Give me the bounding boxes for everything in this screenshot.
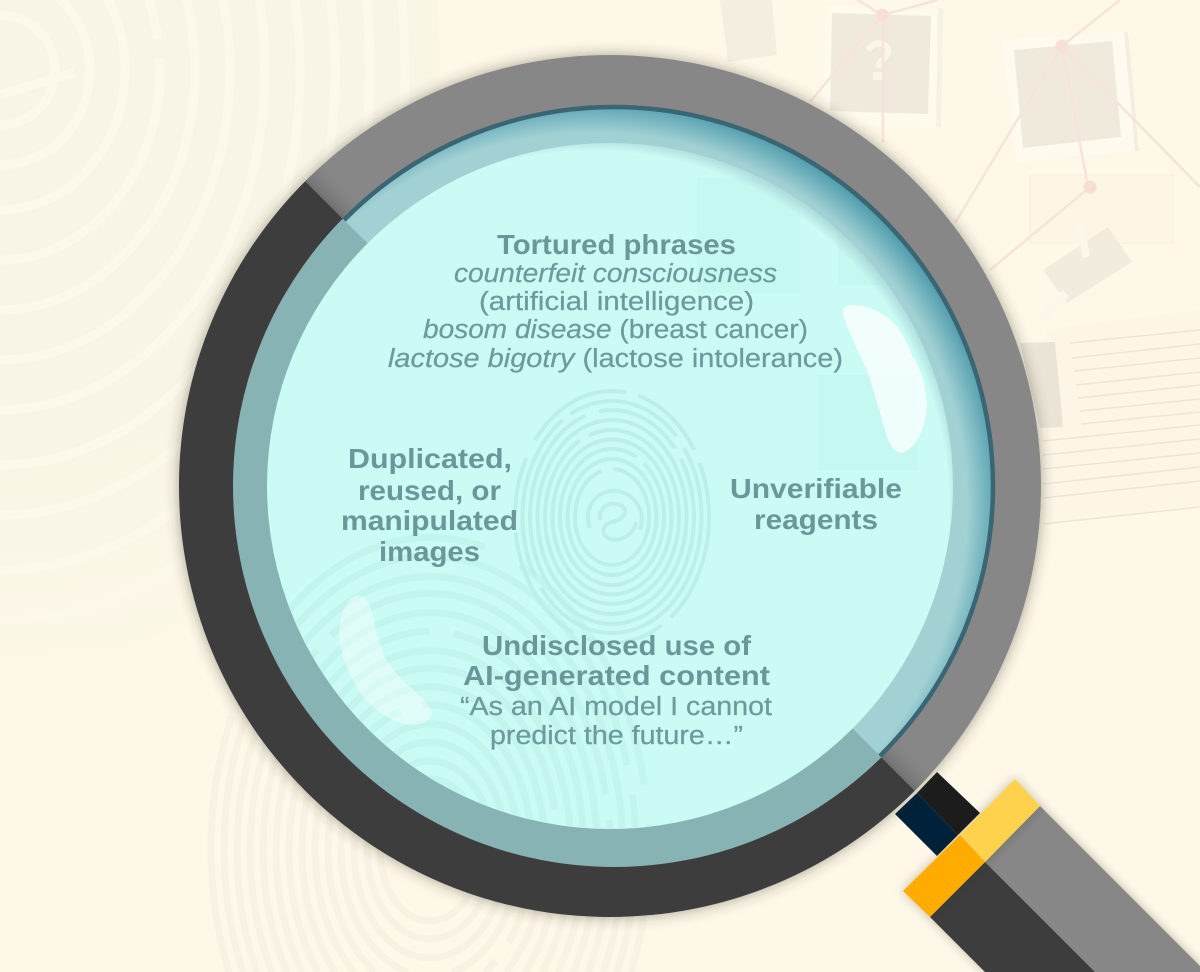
text: undisclosed AI content: “As an AI model I cannot [460, 693, 772, 721]
dark edge [342, 104, 996, 758]
glass edge shading [346, 109, 991, 754]
text: unverifiable reagents [730, 473, 902, 535]
text: duplicated images: manipulated [341, 505, 518, 536]
taped scrap [1038, 223, 1132, 322]
background fingerprint: top left [0, 0, 440, 670]
lens rim: upper-right [342, 135, 965, 758]
glare: left [339, 595, 432, 725]
pins [876, 8, 1096, 194]
text: duplicated images: reused, or [358, 475, 501, 506]
neck [895, 772, 980, 856]
lens [233, 104, 996, 867]
rim seam shading [305, 170, 928, 791]
grip [930, 806, 1200, 972]
magnifying glass handle [895, 772, 1200, 972]
example 1 meaning: (artificial intelligence) [479, 288, 754, 316]
red string [810, 0, 1200, 270]
text: duplicated images: Duplicated, [348, 443, 512, 474]
text: undisclosed AI content: Undisclosed use of [482, 630, 752, 661]
example 3: lactose bigotry (lactose intolerance) [388, 345, 843, 373]
collar [903, 779, 1040, 917]
central fingerprint [515, 391, 709, 643]
text: duplicated images: images [379, 536, 480, 567]
background fingerprint: bottom left [211, 538, 649, 972]
heading: Tortured phrases [497, 229, 736, 260]
lined paper [1020, 310, 1200, 525]
glare: right [843, 305, 927, 453]
magnifying glass rim [179, 55, 1041, 917]
text: unverifiable reagents: Unverifiable [730, 473, 902, 504]
text: tortured phrases [388, 229, 843, 373]
photo with question mark [822, 6, 943, 128]
lens rim: lower-left [233, 218, 882, 867]
text: unverifiable reagents: reagents [754, 504, 878, 535]
suspect photo [1002, 32, 1139, 162]
pale note [1030, 175, 1173, 243]
dark edge tail [282, 217, 343, 300]
example 2: bosom disease (breast cancer) [423, 316, 808, 344]
ghosted fingerprint inside lens [288, 534, 652, 829]
text: undisclosed AI content: predict the future…” [490, 722, 743, 750]
ghosted board inside lens [697, 178, 953, 470]
text: undisclosed AI content [460, 630, 772, 750]
evidence board: pinned photos and string [720, 0, 1200, 525]
torn photo top [720, 0, 777, 62]
lens glass [267, 143, 953, 829]
text: duplicated images [341, 443, 518, 567]
example 1: counterfeit consciousness [454, 260, 777, 288]
text: undisclosed AI content: AI-generated content [463, 660, 770, 691]
